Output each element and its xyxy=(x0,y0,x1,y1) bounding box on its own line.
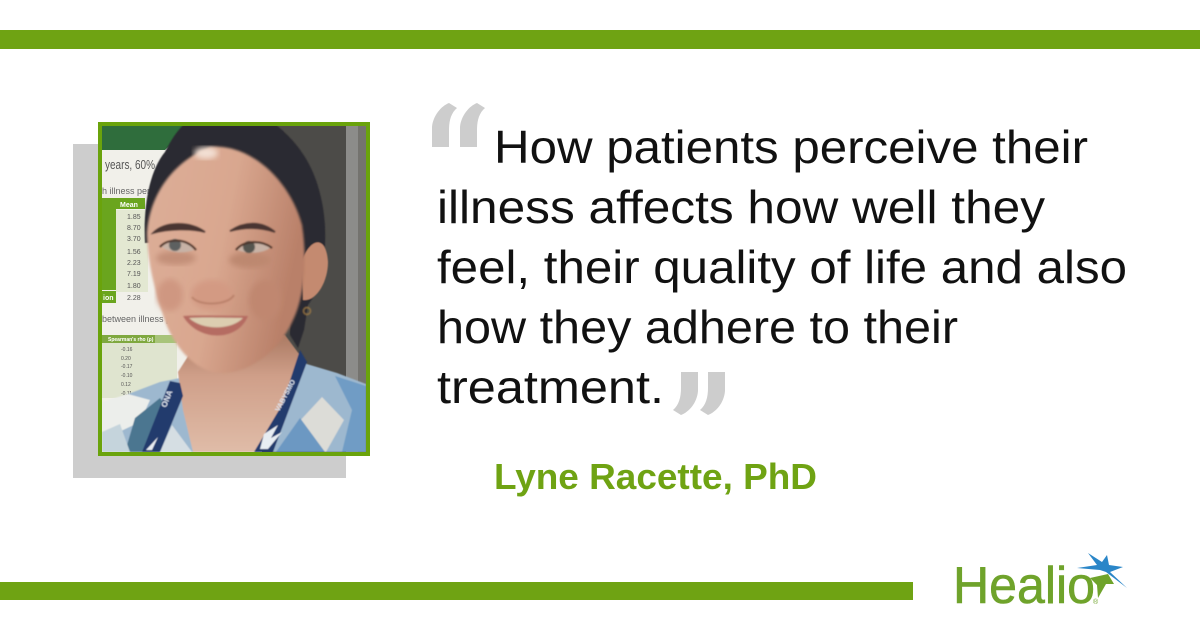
portrait photo: -0.16 xyxy=(121,347,133,353)
bottom green bar xyxy=(0,582,913,600)
portrait photo: ion xyxy=(103,295,114,302)
portrait photo: Spearman's rho (ρ) xyxy=(108,337,154,343)
opening quotation mark xyxy=(432,103,485,147)
Healio logo: Healio xyxy=(953,557,1095,615)
portrait photo: Mean xyxy=(120,202,138,209)
portrait photo: years, 60% xyxy=(105,157,155,172)
portrait photo: -0.11 xyxy=(121,391,132,397)
portrait photo: -0.17 xyxy=(121,364,133,370)
quote text: how they adhere to their xyxy=(437,301,958,353)
portrait photo: -0.10 xyxy=(121,373,133,379)
portrait photo: 3.70 xyxy=(127,236,141,243)
photo shadow panel xyxy=(73,144,346,478)
portrait photo: 2.28 xyxy=(127,295,141,302)
quote text: feel, their quality of life and also xyxy=(437,241,1127,293)
portrait photo: 1.56 xyxy=(127,249,141,256)
quote text: How patients perceive their xyxy=(494,121,1088,173)
quote text: treatment. xyxy=(437,361,664,413)
portrait photo: 8.70 xyxy=(127,225,141,232)
portrait photo: h illness perce xyxy=(102,186,160,196)
attribution name: Lyne Racette, PhD xyxy=(494,456,817,497)
portrait photo: 1.80 xyxy=(127,283,141,290)
quote text xyxy=(437,121,1127,413)
portrait photo: 0.20 xyxy=(121,356,131,362)
top green bar xyxy=(0,30,1200,49)
closing quotation mark xyxy=(673,372,725,415)
portrait photo: 1.85 xyxy=(127,214,141,221)
portrait photo: ONA xyxy=(160,389,175,409)
portrait photo: 0.12 xyxy=(121,382,131,388)
Healio logo: ® xyxy=(1093,598,1099,606)
portrait photo: 2.23 xyxy=(127,260,141,267)
quote text: illness affects how well they xyxy=(437,181,1045,233)
portrait photo: 7.19 xyxy=(127,271,141,278)
portrait photo: between illness pe xyxy=(102,314,176,324)
portrait photo xyxy=(98,122,370,456)
portrait photo: VABYSMO xyxy=(275,378,297,413)
